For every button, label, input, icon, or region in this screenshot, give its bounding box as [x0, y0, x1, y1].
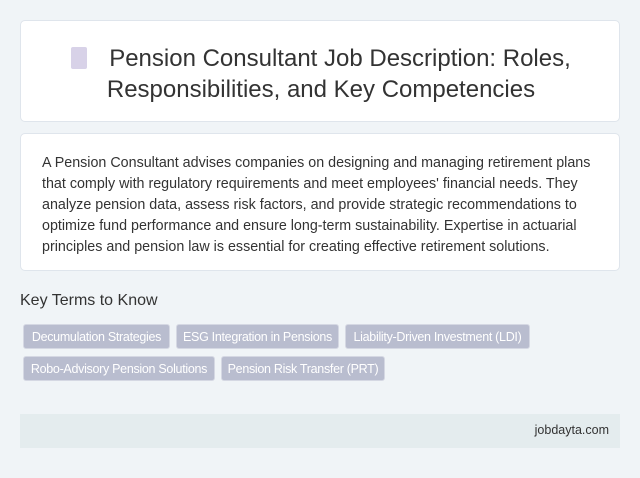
tag 2	[176, 324, 339, 349]
tag 5	[221, 356, 385, 381]
tag 4: Robo-Advisory Pension Solutions	[31, 362, 207, 376]
title	[71, 45, 571, 103]
title card	[20, 20, 620, 122]
footer	[20, 414, 620, 448]
tag 1: Decumulation Strategies	[32, 330, 161, 344]
tag 4	[23, 356, 215, 381]
tag 3	[345, 324, 530, 349]
description card	[20, 133, 620, 271]
tag 3: Liability-Driven Investment (LDI)	[354, 330, 521, 344]
footer text: jobdayta.com	[535, 423, 609, 437]
title: Responsibilities, and Key Competencies	[107, 76, 535, 103]
description text: A Pension Consultant advises companies on designing and managing retirement plans that comply with regulatory requirements and meet employees' financial needs. They analyze pension data, assess risk factors, and provide strategic recommendations to optimize fund performance and ensure long-term sustainability. Expertise in actuarial principles and pension law is essential for creating effective retirement solutions.	[42, 155, 590, 255]
tag 1	[23, 324, 170, 349]
tag 2: ESG Integration in Pensions	[183, 330, 332, 344]
tag 5: Pension Risk Transfer (PRT)	[228, 362, 378, 376]
title: Pension Consultant Job Description: Roles,	[109, 45, 571, 72]
heading: key terms: Key Terms to Know	[20, 292, 158, 309]
